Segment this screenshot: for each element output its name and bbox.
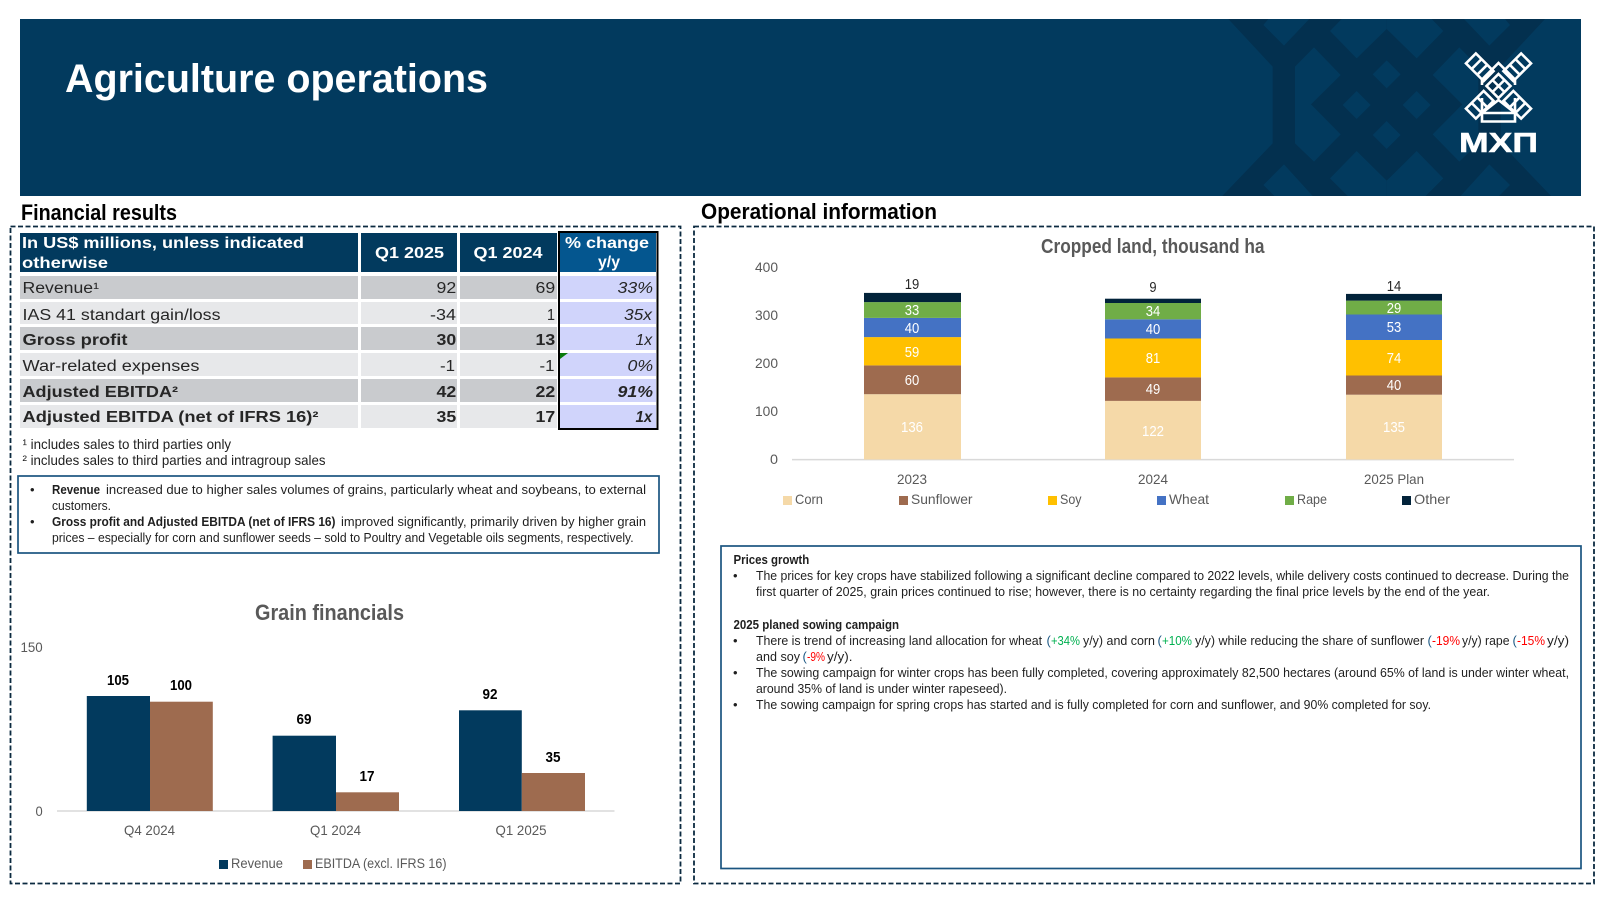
stacked bar: 2023: 19: [905, 277, 919, 293]
chart legend: Corn: [795, 491, 823, 507]
row: adjusted EBITDA: 42: [436, 384, 456, 401]
footnotes: ¹ includes sales to third parties only: [22, 436, 231, 452]
stacked bar: 2025 Plan: 135: [1383, 420, 1405, 436]
bars: Q4 2024: 100: [170, 678, 192, 694]
stacked bar: 2025 Plan: 14: [1387, 279, 1401, 295]
row: adjusted EBITDA net of IFRS 16: 1x: [636, 409, 654, 426]
row: IAS 41: 1: [547, 307, 555, 324]
row: adjusted EBITDA net of IFRS 16: 35: [436, 409, 457, 426]
row: IAS 41: 35x: [624, 307, 653, 324]
row: war-related expenses: -1: [540, 358, 554, 375]
y axis labels: [20, 639, 43, 819]
chart title: Grain financials: [255, 600, 404, 625]
text box: operational commentary: [721, 546, 1581, 868]
bullet: prices: [733, 568, 1569, 599]
footnotes: ² includes sales to third parties and intragroup sales: [22, 452, 326, 468]
bullet: winter crops: around 35% of land is under winter rapeseed).: [756, 681, 1007, 696]
row: revenue: [20, 276, 656, 299]
row: gross profit: 30: [436, 332, 456, 349]
row: revenue: Revenue¹: [22, 280, 99, 297]
logo wordmark: МХП: [1459, 127, 1538, 158]
stacked bar: 2023: 40: [905, 321, 919, 337]
table header row: Q1 2025: [375, 245, 444, 262]
icon: windmill logo: [1466, 53, 1531, 122]
chart legend: Rape: [1297, 491, 1327, 507]
stacked bar chart: cropped land: [755, 236, 1514, 507]
highlight box: % change column: [559, 232, 658, 429]
bullet: land allocation: +34%: [1051, 633, 1080, 648]
bullet: land allocation: y/y) and corn: [1083, 633, 1155, 648]
row: IAS 41: -34: [430, 307, 456, 324]
bullet: prices: first quarter of 2025, grain prices continued to rise; however, there is no certainty regarding the final price levels by the end of the year.: [756, 584, 1490, 599]
stacked bar: 2025 Plan: 53: [1387, 320, 1401, 336]
row: IAS 41: IAS 41 standart gain/loss: [22, 307, 221, 324]
title: Agriculture operations: [65, 57, 488, 101]
bullet: land allocation: +10%: [1162, 633, 1192, 648]
bars: Q4 2024: [87, 673, 213, 838]
row: adjusted EBITDA net of IFRS 16: [20, 405, 656, 428]
stacked bar: 2023: [864, 277, 961, 487]
stacked bar: 2023: 59: [905, 345, 919, 361]
stacked bar: 2024: 2024: [1138, 471, 1168, 487]
chart legend: Sunflower: [911, 491, 973, 507]
bar chart: grain financials: [20, 600, 614, 871]
bullet: winter crops: •: [733, 665, 738, 680]
stacked bar: 2023: 60: [905, 373, 919, 389]
y axis labels: 150: [20, 639, 43, 655]
bullet: land allocation: y/y): [1547, 633, 1569, 648]
bars: Q1 2024: 17: [360, 769, 374, 785]
y axis labels: 300: [755, 307, 778, 323]
stacked bar: 2025 Plan: 29: [1387, 301, 1401, 317]
stacked bar: 2025 Plan: [1346, 279, 1442, 487]
subheading: prices growth: Prices growth: [734, 552, 809, 567]
stacked bar: 2023: 136: [901, 420, 923, 436]
chart title: Cropped land, thousand ha: [1041, 236, 1265, 258]
bullet: land allocation: and soy: [756, 649, 800, 664]
bullet: land allocation: •: [733, 633, 738, 648]
y axis labels: 100: [755, 403, 778, 419]
text box: financial commentary: Revenue: [52, 482, 100, 497]
text box: financial commentary: increased due to higher sales volumes of grains, particularly wheat and soybeans, to external: [106, 482, 646, 497]
bullet: land allocation: (: [802, 649, 808, 664]
row: adjusted EBITDA: [20, 379, 656, 402]
bullet: land allocation: (: [1428, 633, 1432, 648]
row: war-related expenses: 0%: [628, 358, 653, 375]
stacked bar: 2025 Plan: 2025 Plan: [1364, 471, 1424, 487]
bullet: land allocation: (: [1512, 633, 1518, 648]
bars: Q4 2024: 105: [107, 673, 129, 689]
footnotes: [22, 436, 326, 468]
text box: financial commentary: •: [30, 482, 35, 497]
text box: financial commentary: •: [30, 514, 35, 529]
heading: operational information: Operational information: [701, 199, 937, 224]
bullet: land allocation: y/y) while reducing the share of sunflower: [1195, 633, 1425, 648]
stacked bar: 2023: 33: [905, 303, 919, 319]
stacked bar: 2025 Plan: 74: [1387, 351, 1401, 367]
bullet: land allocation: -9%: [807, 649, 825, 664]
bullet: spring crops: The sowing campaign for spring crops has started and is fully completed for corn and sunflower, and 90% completed for soy.: [756, 697, 1431, 712]
row: adjusted EBITDA net of IFRS 16: 17: [536, 409, 555, 426]
bullet: land allocation: -19%: [1432, 633, 1460, 648]
stacked bar: 2024: 122: [1142, 424, 1164, 440]
panel: operational information: [694, 226, 1594, 884]
bullet: prices: The prices for key crops have stabilized following a significant decline compared to 2022 levels, while delivery costs continued to decrease. During the: [756, 568, 1569, 583]
text box: financial commentary: customers.: [52, 498, 111, 513]
bars: Q1 2024: [273, 712, 399, 838]
table header row: In US$ millions, unless indicated: [22, 235, 304, 252]
row: adjusted EBITDA: Adjusted EBITDA²: [22, 384, 178, 401]
bullet: winter crops: [733, 665, 1569, 696]
row: revenue: 92: [436, 280, 456, 297]
table header row: y/y: [598, 254, 620, 271]
row: gross profit: Gross profit: [22, 332, 128, 349]
y axis labels: 400: [755, 259, 778, 275]
text box: financial commentary: [18, 476, 659, 553]
table header row: % change: [565, 235, 649, 252]
row: war-related expenses: War-related expenses: [22, 358, 200, 375]
bullet: prices: •: [733, 568, 738, 583]
table header row: [20, 233, 656, 272]
bullet: land allocation: [733, 633, 1569, 664]
bullet: spring crops: •: [733, 697, 738, 712]
bars: Q1 2024: 69: [296, 712, 312, 728]
row: adjusted EBITDA: 91%: [618, 384, 653, 401]
bullet: land allocation: (: [1158, 633, 1162, 648]
bullet: land allocation: There is trend of increasing land allocation for wheat: [756, 633, 1042, 648]
stacked bar: 2024: 9: [1149, 280, 1157, 296]
chart legend: Wheat: [1169, 491, 1209, 507]
table: financial results: [20, 232, 658, 429]
bars: Q1 2025: 35: [546, 750, 560, 766]
row: adjusted EBITDA: 22: [536, 384, 555, 401]
bars: Q4 2024: Q4 2024: [124, 822, 175, 838]
bullet: land allocation: y/y).: [827, 649, 852, 664]
chart legend: [219, 855, 446, 871]
subheading: sowing campaign: 2025 planed sowing campaign: [734, 617, 899, 632]
chart legend: [783, 491, 1450, 507]
bullet: winter crops: The sowing campaign for winter crops has been fully completed, covering approximately 82,500 hectares (around 65% of land is under winter wheat,: [756, 665, 1569, 680]
heading: financial results: Financial results: [21, 200, 177, 225]
row: war-related expenses: [20, 353, 656, 376]
bullet: land allocation: (: [1046, 633, 1052, 648]
row: gross profit: [20, 327, 656, 350]
row: gross profit: 13: [536, 332, 556, 349]
row: IAS 41: [20, 302, 656, 324]
bullet: land allocation: y/y) rape: [1462, 633, 1510, 648]
row: adjusted EBITDA net of IFRS 16: Adjusted EBITDA (net of IFRS 16)²: [22, 409, 318, 426]
bars: Q1 2025: Q1 2025: [496, 822, 547, 838]
stacked bar: 2024: 40: [1146, 322, 1160, 338]
row: gross profit: 1x: [636, 332, 653, 349]
text box: financial commentary: Gross profit and Adjusted EBITDA (net of IFRS 16): [52, 514, 336, 529]
stacked bar: 2023: 2023: [897, 471, 927, 487]
chart legend: Soy: [1060, 491, 1082, 507]
stacked bar: 2025 Plan: 40: [1387, 378, 1401, 394]
chart legend: EBITDA (excl. IFRS 16): [315, 855, 446, 871]
row: war-related expenses: -1: [440, 358, 455, 375]
stacked bar: 2024: 81: [1146, 351, 1160, 367]
stacked bar: 2024: [1105, 280, 1201, 487]
y axis labels: 200: [755, 355, 778, 371]
header banner: [20, 19, 1581, 197]
table header row: Q1 2024: [474, 245, 543, 262]
bullet: land allocation: -15%: [1517, 633, 1545, 648]
row: revenue: 33%: [618, 280, 653, 297]
panel: financial results: [10, 226, 680, 884]
y axis labels: [755, 259, 778, 467]
y axis labels: 0: [770, 451, 778, 467]
text box: financial commentary: prices – especially for corn and sunflower seeds – sold to Poultry and Vegetable oils segments, respectively.: [52, 530, 634, 545]
bars: Q1 2024: Q1 2024: [310, 822, 361, 838]
bars: Q1 2025: 92: [482, 687, 498, 703]
table header row: otherwise: [22, 255, 108, 272]
chart legend: Revenue: [231, 855, 283, 871]
stacked bar: 2024: 34: [1146, 304, 1160, 320]
bars: Q1 2025: [459, 687, 585, 838]
y axis labels: 0: [36, 803, 43, 819]
stacked bar: 2024: 49: [1146, 382, 1160, 398]
row: revenue: 69: [536, 280, 555, 297]
text box: financial commentary: improved significantly, primarily driven by higher grain: [341, 514, 646, 529]
chart legend: Other: [1414, 491, 1450, 507]
